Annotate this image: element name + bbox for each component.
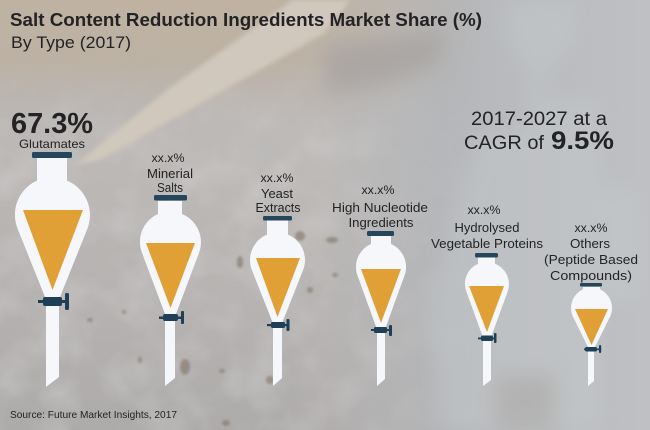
stopcock [38,293,69,310]
value and label: Compounds) [550,269,632,283]
liquid [256,258,300,317]
value and label: xx.x% [574,223,608,235]
flask body [571,287,612,386]
stopcock [267,319,290,331]
value and label [332,185,428,230]
flask: Others (Peptide Based Compounds) [544,223,638,386]
value and label: Hydrolysed [454,221,520,235]
CAGR callout [464,109,614,155]
liquid [469,286,504,332]
stopcock [159,311,184,324]
value and label: Glutamates [19,137,85,151]
value and label: 67.3% [11,108,93,140]
flask body [356,236,406,386]
cap [154,195,187,200]
flask: High Nucleotide Ingredients [332,185,428,386]
subtitle: By Type (2017) [11,33,131,52]
value and label [544,223,638,283]
cap [263,216,292,220]
value and label: Vegetable Proteins [431,237,543,251]
flask body [465,257,509,386]
stopcock [478,333,496,343]
flask: Hydrolysed Vegetable Proteins [431,205,543,386]
value and label: xx.x% [260,173,294,185]
value and label: Yeast [261,187,294,201]
CAGR callout: 9.5% [551,127,614,155]
value and label [147,153,193,195]
stopcock [584,345,601,353]
value and label [431,205,543,251]
value and label: xx.x% [468,205,500,217]
value and label: High Nucleotide [332,201,428,215]
cap [32,152,72,158]
value and label: xx.x% [152,153,184,165]
flask: Glutamates 67.3% [11,108,93,387]
CAGR callout: 2017-2027 at a [471,109,607,130]
value and label: Extracts [256,201,300,215]
cap [367,231,394,236]
liquid [146,243,195,308]
flask body [250,220,305,386]
liquid [575,309,608,345]
liquid [361,269,401,323]
value and label: Ingredients [348,216,414,230]
flask body [15,158,90,387]
value and label: Others [570,237,610,251]
flask: Yeast Extracts [250,173,305,386]
source note: Source: Future Market Insights, 2017 [10,409,177,421]
value and label: xx.x% [362,185,394,197]
cap [580,283,602,286]
value and label: Salts [157,181,183,195]
cap [475,253,498,258]
liquid [23,210,83,290]
title: Salt Content Reduction Ingredients Market Share (%) [10,10,482,30]
value and label [256,173,300,215]
value and label: (Peptide Based [544,253,638,267]
flask: Mineral Salts [140,153,201,386]
stopcock [371,325,392,336]
value and label: Minerial [147,167,193,181]
flask body [140,201,201,386]
CAGR callout: CAGR of [464,133,545,154]
